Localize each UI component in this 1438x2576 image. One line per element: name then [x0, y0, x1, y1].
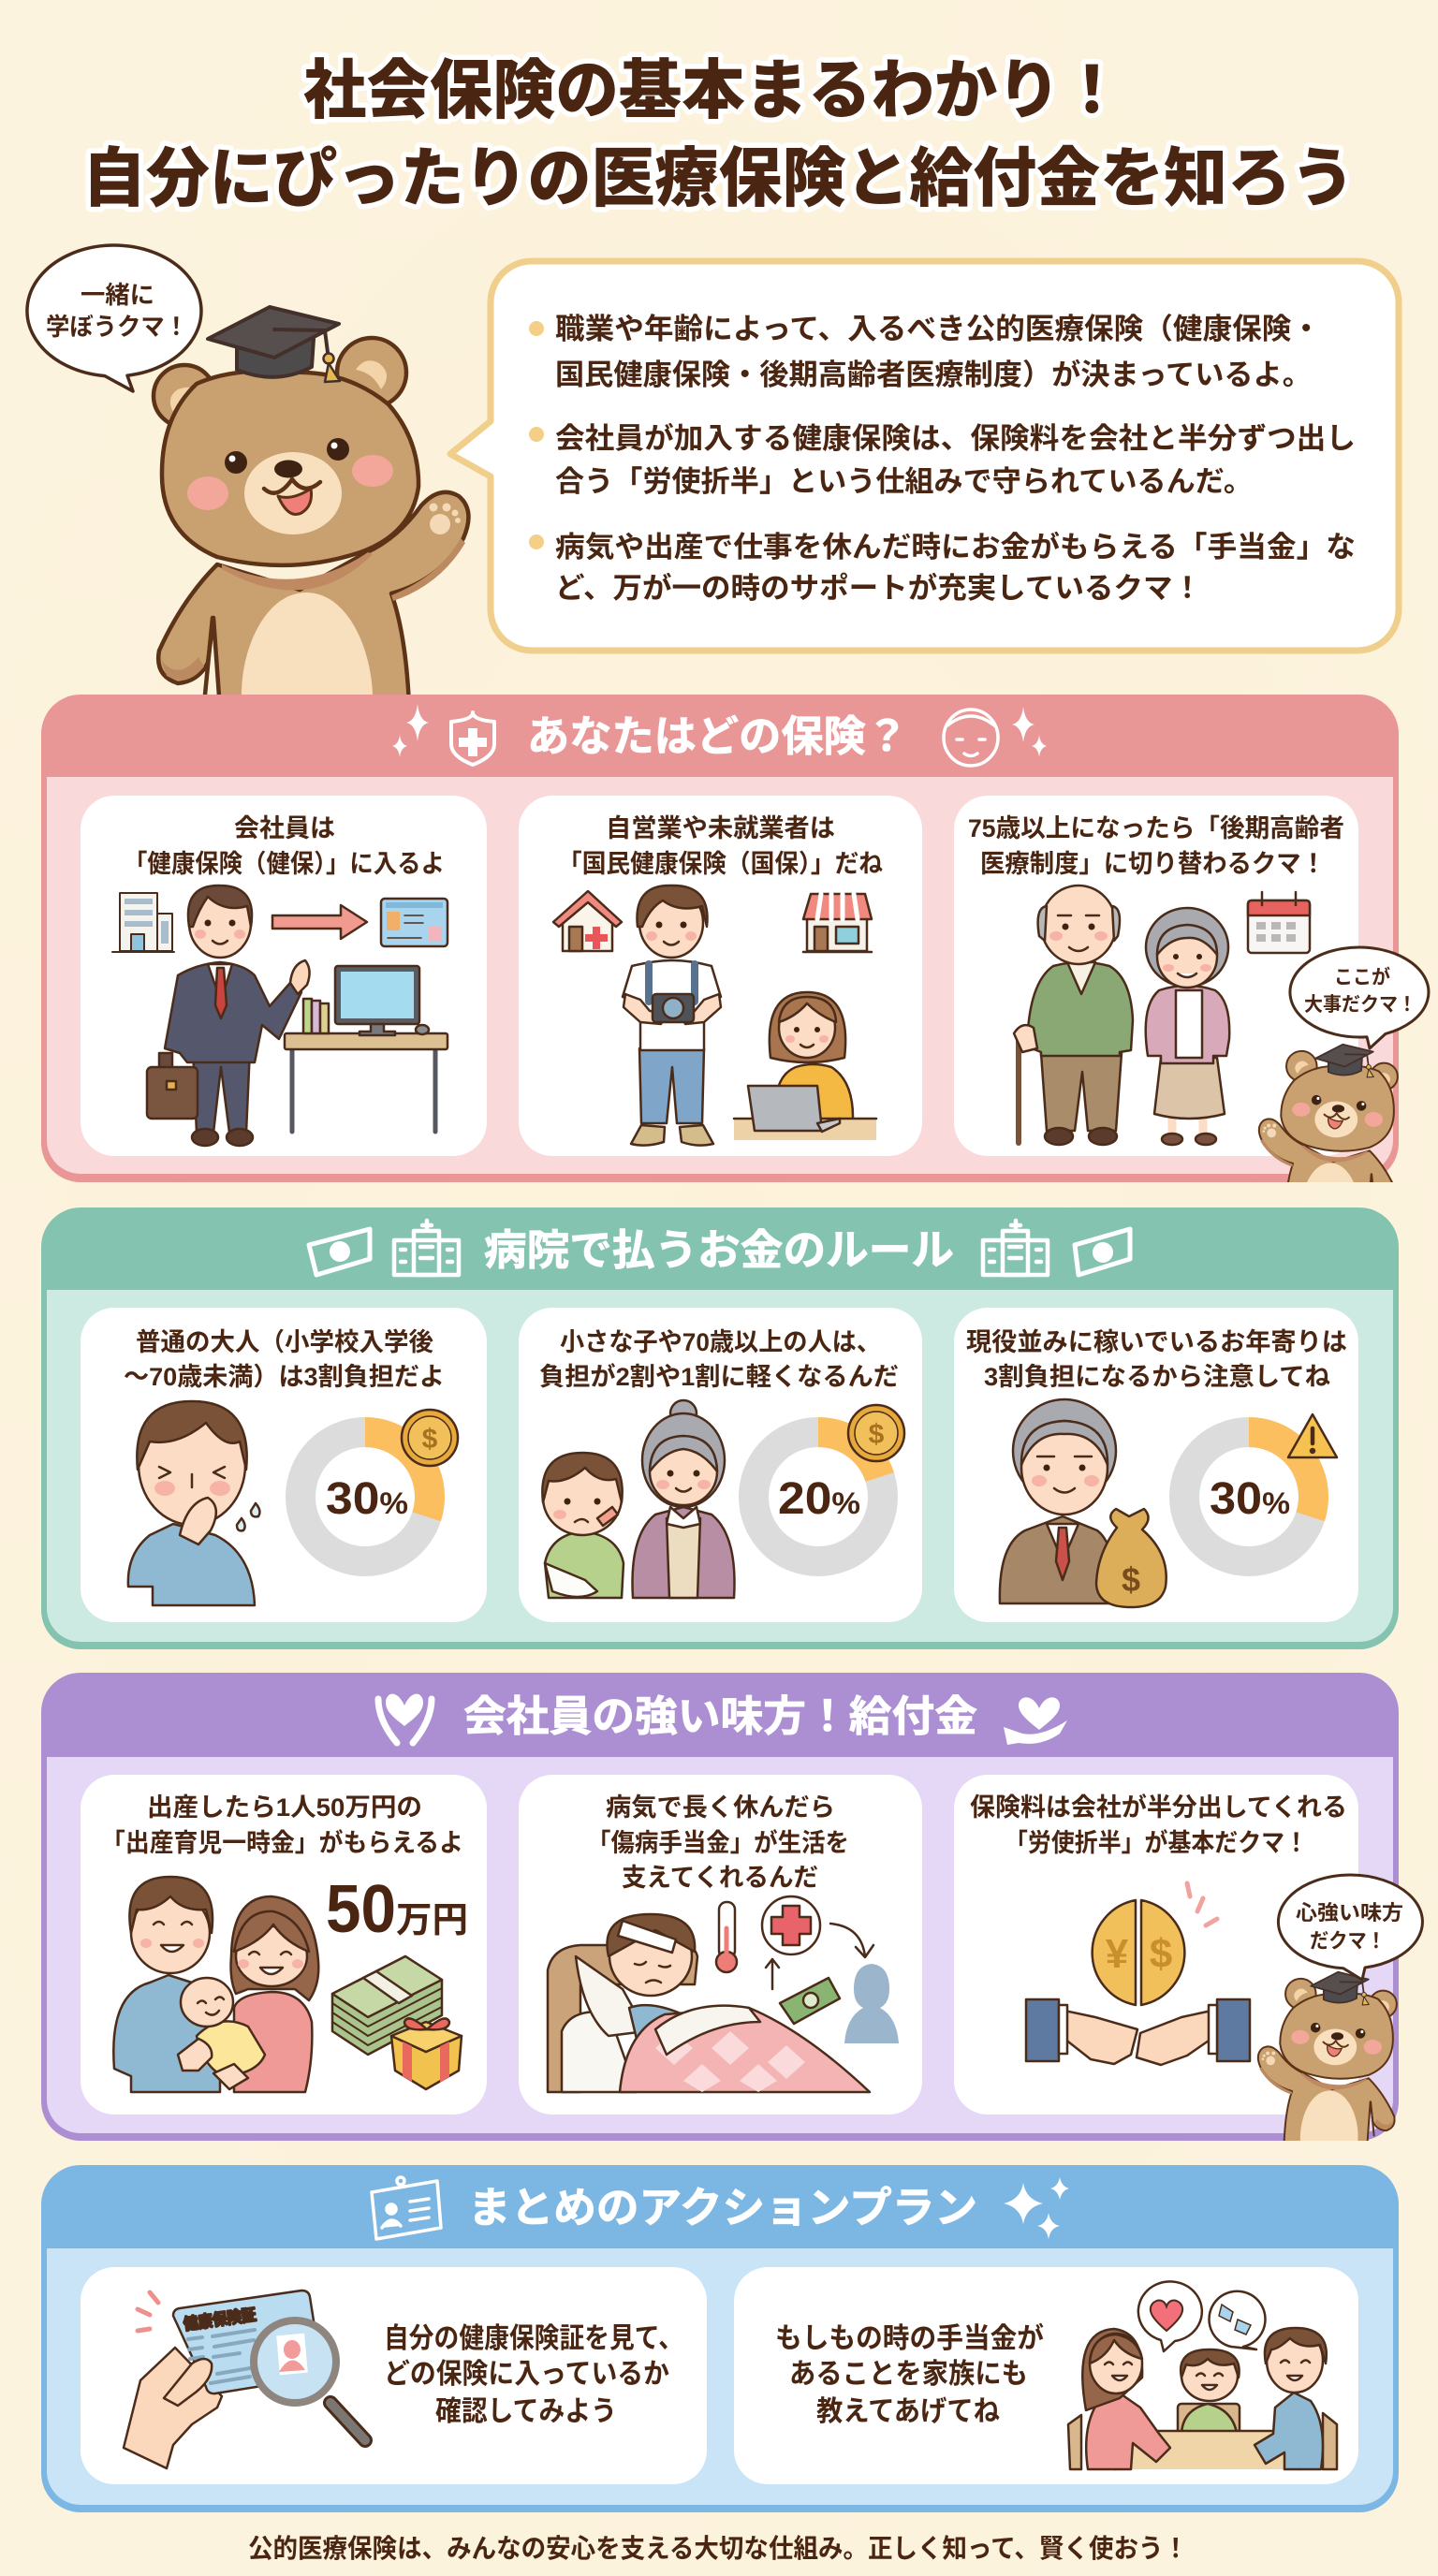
heading: 病院で払うお金のルール: [484, 1226, 954, 1274]
card 3: 現役並みに稼いでいるお年寄りは: [966, 1328, 1347, 1356]
icon: split coin: $: [1150, 1931, 1172, 1977]
donut chart: 30%: 30%: [1210, 1474, 1290, 1524]
footer message: 公的医療保険は、みんなの安心を支える大切な仕組み。正しく知って、賢く使おう！: [248, 2534, 1188, 2563]
text block: 教えてあげてね: [816, 2396, 1000, 2427]
card 2: [519, 1308, 922, 1622]
mascot bear: small: [1258, 1043, 1399, 1182]
icon: house with cross: [553, 891, 622, 951]
text block: [775, 2322, 1044, 2427]
card 3: [954, 796, 1358, 1156]
icon: hand holding card with magnifier: 健康保険証: [183, 2305, 257, 2334]
card 1: 「健康保険（健保）」に入るよ: [124, 850, 445, 878]
card 1: [81, 1308, 487, 1622]
card 1: 〜70歳未満）は3割負担だよ: [124, 1363, 445, 1391]
desk with computer: [285, 966, 448, 1132]
icon: coin: $: [422, 1424, 438, 1455]
card 2: 負担が2割や1割に軽くなるんだ: [539, 1362, 899, 1391]
person: self-employed: [623, 886, 721, 1146]
label: 50万円: 万円: [396, 1901, 468, 1940]
card 2: 病気で長く休んだら: [606, 1793, 835, 1822]
icon: banknote left: [309, 1229, 370, 1275]
icon: health insurance card: [381, 899, 448, 946]
sparkle marks: [1187, 1883, 1217, 1925]
icon: person silhouette: [844, 1964, 899, 2043]
card 3: 保険料は会社が半分出してくれる: [970, 1793, 1347, 1822]
icon: sparkles: [1004, 2177, 1069, 2239]
icon: red cross circle: [762, 1896, 820, 1954]
bullet 3: 病気や出産で仕事を休んだ時にお金がもらえる「手当金」な: [555, 531, 1356, 564]
person: office worker: [147, 886, 310, 1146]
heading: まとめのアクションプラン: [468, 2184, 977, 2232]
text block: どの保険に入っているか: [384, 2359, 669, 2390]
bullet 2: 合う「労使折半」という仕組みで守られているんだ。: [555, 465, 1253, 498]
card 2: [519, 1775, 922, 2115]
arrow: to health card: [272, 905, 367, 939]
icon: sparkles left: [392, 704, 429, 757]
icon: hands holding heart left: [378, 1694, 432, 1743]
card 3: [954, 1308, 1358, 1622]
card 3: 3割負担になるから注意してね: [984, 1363, 1330, 1391]
panel: 病院で払うお金のルール: [41, 1208, 1399, 1649]
person in bed: [548, 1914, 870, 2092]
card 3: 「労使折半」が基本だクマ！: [1005, 1828, 1308, 1857]
mascot bear: small: [1258, 1972, 1397, 2159]
icon: banknote right: [1075, 1229, 1130, 1275]
text block: あることを家族にも: [789, 2359, 1028, 2390]
text block: 自分の健康保険証を見て、: [384, 2323, 683, 2354]
icon: shop: [803, 894, 872, 952]
icon: money bag: [1096, 1509, 1167, 1607]
speech bubble: ここが大事だクマ: [1290, 947, 1429, 1048]
donut chart: 30%: 30%: [326, 1474, 408, 1524]
panel: あなたはどの保険: [41, 695, 1429, 1232]
icon: hospital right: [983, 1221, 1048, 1275]
icon: shaking hands: [1026, 1999, 1250, 2065]
person: grandmother: [633, 1400, 734, 1598]
icon: split coin: ¥: [1106, 1931, 1129, 1977]
family with baby: [113, 1877, 318, 2092]
icon: coin: [402, 1410, 458, 1466]
icon: coin: [848, 1405, 904, 1461]
card 1: [81, 2267, 707, 2484]
title: 社会保険の基本まるわかり！: [303, 54, 1123, 126]
icon: thermometer: [716, 1902, 737, 1972]
donut chart: 30%: [301, 1432, 430, 1561]
bullet 1: 国民健康保険・後期高齢者医療制度）が決まっているよ。: [555, 359, 1312, 391]
title: [82, 54, 1355, 214]
card 2: 「国民健康保険（国保）」だね: [558, 850, 883, 878]
icon: hospital left: [394, 1221, 459, 1275]
arrow: curved down: [830, 1924, 873, 1957]
label: 50万円: 50: [326, 1872, 396, 1947]
speech bubble: 心強い味方だクマ: 心強い味方: [1296, 1901, 1403, 1925]
text block: 確認してみよう: [435, 2396, 617, 2427]
icon: elder face: [944, 710, 998, 766]
bullet 1: [529, 313, 1321, 391]
arrow: up: [766, 1959, 779, 1989]
donut chart: 30%: [1184, 1432, 1313, 1561]
card 2: 「傷病手当金」が生活を: [587, 1828, 849, 1857]
bullet 2: [529, 422, 1356, 498]
bullet 1: 職業や年齢によって、入るべき公的医療保険（健康保険・: [555, 313, 1321, 345]
card 3: 医療制度」に切り替わるクマ！: [980, 850, 1326, 878]
card 2: [519, 796, 922, 1156]
panel: まとめのアクションプラン: [41, 2165, 1399, 2512]
icon: coin: $: [869, 1419, 885, 1450]
person: senior worker: [1000, 1399, 1118, 1603]
speech bubble: 一緒に学ぼうクマ: 一緒に: [81, 281, 154, 309]
mascot bear: large: [154, 307, 468, 749]
intro callout box: [450, 261, 1399, 651]
heading: あなたはどの保険？: [527, 712, 908, 760]
card 2: 支えてくれるんだ: [622, 1864, 818, 1892]
icon: shield: [451, 712, 494, 765]
card 1: 「出産育児一時金」がもらえるよ: [101, 1828, 463, 1857]
speech bubble: icon: [1210, 2291, 1266, 2349]
icon: gift box: [391, 2018, 462, 2089]
speech bubble: 心強い味方だクマ: だクマ！: [1310, 1929, 1386, 1953]
person: elderly man with cane: [1014, 886, 1133, 1145]
icon: money bag: $: [1122, 1560, 1140, 1599]
speech bubble: ここが大事だクマ: ここが: [1334, 966, 1390, 988]
card 2: 自営業や未就業者は: [606, 814, 835, 842]
card 1: 普通の大人（小学校入学後: [136, 1328, 433, 1356]
person: child with sling: [542, 1453, 624, 1598]
speech bubble: 一緒に学ぼうクマ: 学ぼうクマ！: [46, 313, 188, 341]
donut chart: 20%: 20%: [778, 1474, 860, 1524]
family at table: [1068, 2328, 1337, 2469]
icon: money: [780, 1978, 840, 2024]
card 3: 75歳以上になったら「後期高齢者: [968, 814, 1344, 842]
speech bubble: 一緒に学ぼうクマ: [27, 245, 201, 391]
donut chart: 20%: [754, 1432, 883, 1561]
icon: warning triangle: [1288, 1414, 1337, 1457]
text block: もしもの時の手当金が: [775, 2322, 1044, 2354]
person: woman with laptop: [734, 992, 876, 1140]
card 1: 出産したら1人50万円の: [147, 1793, 422, 1822]
icon: split coin: [1093, 1900, 1184, 2005]
icon: office building: [112, 893, 174, 952]
panel: 会社員の強い味方！給付金: [41, 1673, 1422, 2159]
person: coughing adult: [128, 1401, 259, 1605]
icon: money stacks: [332, 1956, 442, 2055]
bullet 2: 会社員が加入する健康保険は、保険料を会社と半分ずつ出し: [555, 422, 1356, 455]
person: elderly woman: [1146, 908, 1229, 1145]
text block: [384, 2323, 683, 2427]
sparkle marks: [138, 2292, 158, 2331]
icon: id badge: [372, 2177, 441, 2239]
card 2: [734, 2267, 1358, 2484]
speech bubble: 心強い味方だクマ: [1278, 1875, 1422, 1980]
icon: calendar: [1248, 892, 1310, 953]
card 1: [81, 796, 487, 1156]
bullet 3: ど、万が一の時のサポートが充実しているクマ！: [555, 572, 1202, 605]
bullet 3: [529, 531, 1356, 605]
label: 50万円: [326, 1872, 468, 1947]
speech bubble: ここが大事だクマ: 大事だクマ！: [1304, 993, 1416, 1016]
card 3: [954, 1775, 1358, 2115]
icon: hand holding heart right: [1004, 1697, 1067, 1745]
card 1: 会社員は: [234, 814, 335, 842]
icon: sparkles right: [1012, 707, 1047, 757]
card 1: [81, 1775, 487, 2115]
icon: hand holding card with magnifier: [124, 2291, 365, 2468]
card 2: 小さな子や70歳以上の人は、: [560, 1328, 881, 1356]
heading: 会社員の強い味方！給付金: [463, 1692, 977, 1740]
title: 自分にぴったりの医療保険と給付金を知ろう: [82, 142, 1355, 214]
speech bubble: heart: [1138, 2281, 1202, 2351]
